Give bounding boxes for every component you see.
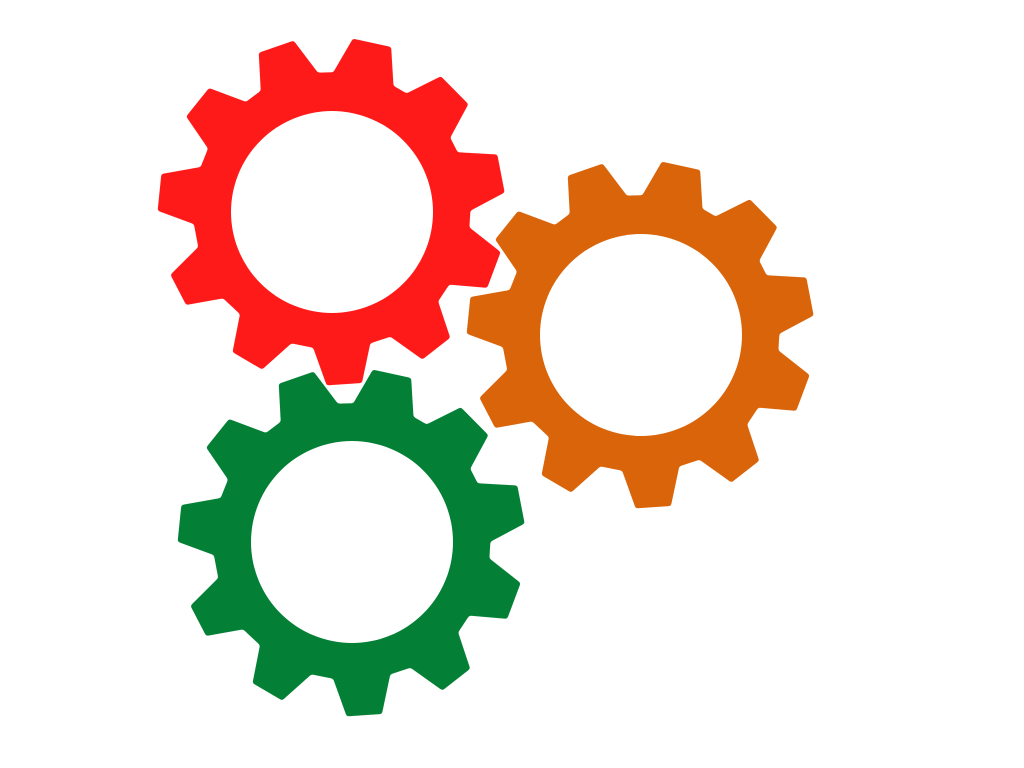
icon: green gear xyxy=(178,370,525,716)
icon: red gear xyxy=(158,39,505,385)
icon: orange gear xyxy=(467,162,814,508)
